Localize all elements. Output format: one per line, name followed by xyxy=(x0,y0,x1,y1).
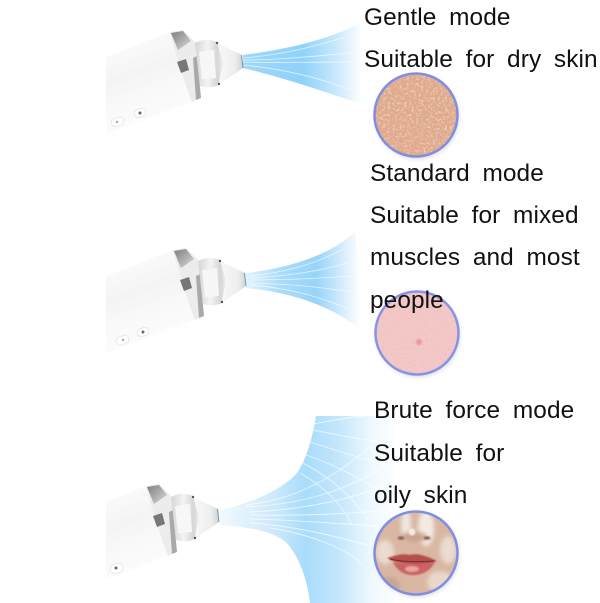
text: suitable for oily skin xyxy=(374,440,504,509)
panel: brute force mode xyxy=(66,397,574,603)
spray: narrow blue jet xyxy=(243,22,362,104)
panel: gentle mode xyxy=(90,4,598,159)
image: pink skin circle xyxy=(375,291,460,377)
image: face with lips circle xyxy=(374,510,459,600)
device: handheld nozzle xyxy=(106,248,246,346)
text: suitable for mixed muscles and most people: Suitable for mixed xyxy=(370,202,579,229)
panel: standard mode xyxy=(93,160,580,377)
device: handheld nozzle xyxy=(106,484,220,574)
heading: standard mode: Standard mode xyxy=(370,160,544,187)
text: suitable for mixed muscles and most people: people xyxy=(370,287,444,314)
heading: brute force mode: Brute force mode xyxy=(374,397,574,424)
image: dry skin circle xyxy=(374,73,459,159)
device: handheld nozzle xyxy=(106,30,244,127)
text: suitable for mixed muscles and most people: muscles and most xyxy=(370,244,580,271)
text: suitable for oily skin: oily skin xyxy=(374,482,467,509)
spray: medium blue jet xyxy=(246,232,362,330)
text: suitable for oily skin: Suitable for xyxy=(374,440,504,467)
spray: wide blue blast xyxy=(220,416,395,603)
heading: gentle mode: Gentle mode xyxy=(364,4,511,31)
text: suitable for dry skin: Suitable for dry skin xyxy=(364,46,598,73)
text: suitable for mixed muscles and most people xyxy=(370,202,580,314)
